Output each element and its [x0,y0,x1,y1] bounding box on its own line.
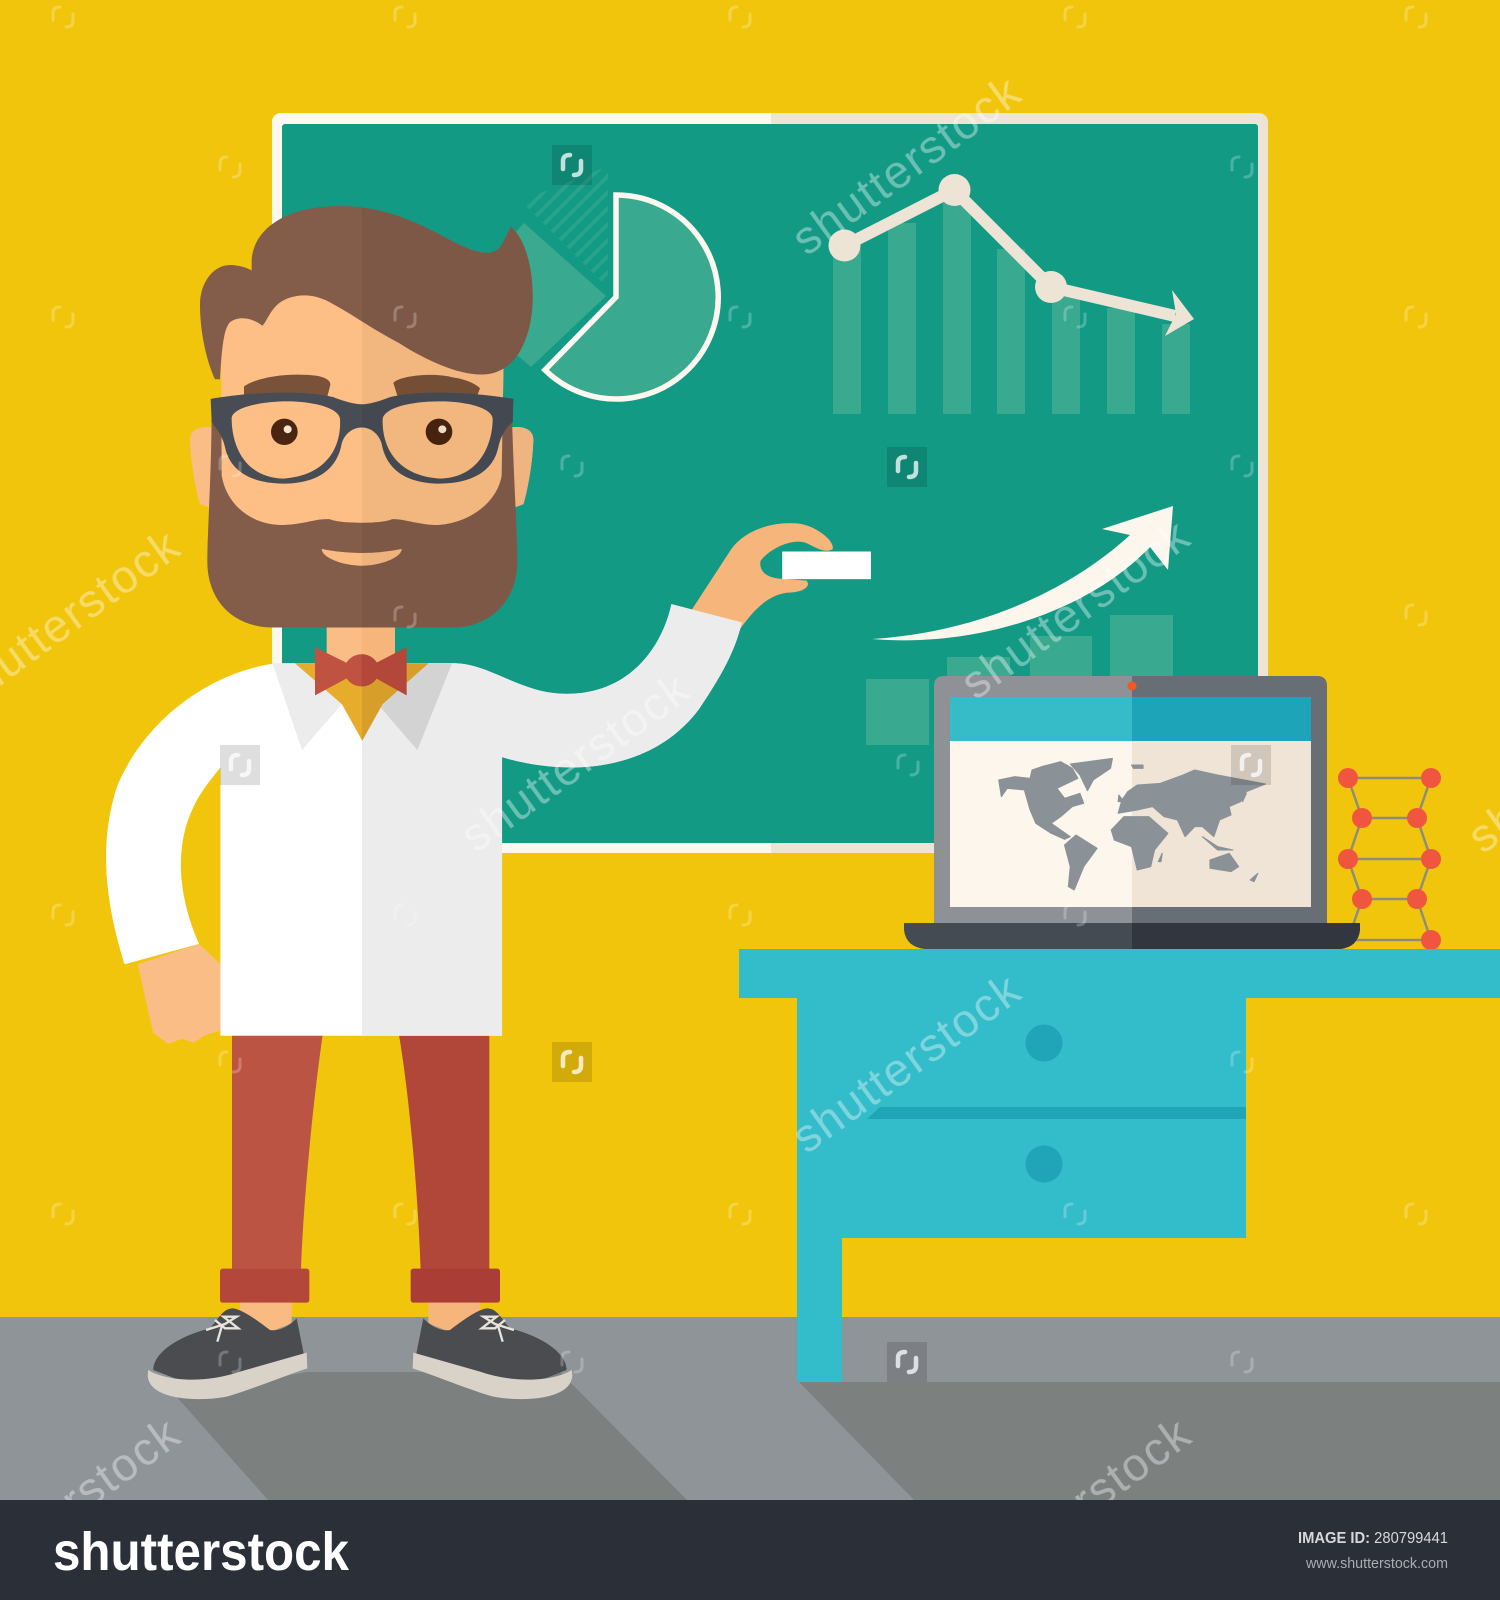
eyes [271,419,452,445]
molecule model [1338,768,1441,950]
right shoe [413,1308,572,1399]
small watermark marks [53,7,1426,1372]
left shoe [148,1308,307,1399]
face [221,276,505,525]
laptop [904,676,1360,949]
neck and bow tie [315,622,407,695]
lowered hand [138,944,220,1044]
trousers and shoes [148,1035,572,1399]
desk [739,949,1500,1382]
footer bar [0,1500,1500,1600]
head [190,206,533,627]
shirt and sleeves [106,604,742,1036]
shaded half of head [362,208,534,628]
world map [999,758,1265,890]
beard [207,404,517,627]
chalkboard [272,113,1268,853]
mouth [322,549,402,566]
diagonal watermarks: shutterstock [782,963,1030,1163]
bar chart with trend line [828,174,1194,414]
ears [190,427,533,508]
diagonal watermarks: shutterstock [951,509,1199,709]
footer logo: shutterstock [53,1522,350,1582]
eyebrows [244,375,480,399]
diagonal watermarks: shutterstock [782,65,1030,265]
growth arrow [872,506,1173,640]
raised hand holding chalk [689,523,871,628]
hair [200,206,533,379]
small bar chart [866,615,1173,745]
boxed watermark marks [220,145,1271,1382]
laptop base front [1132,923,1360,949]
shaded half of shirt [362,604,742,1036]
floor [0,1317,1500,1502]
diagonal watermarks: shutterstock [451,662,699,862]
image id: IMAGE ID: 280799441 [1298,1530,1448,1547]
glasses [211,393,513,484]
website: www.shutterstock.com [1305,1555,1448,1572]
pie chart [516,168,721,402]
